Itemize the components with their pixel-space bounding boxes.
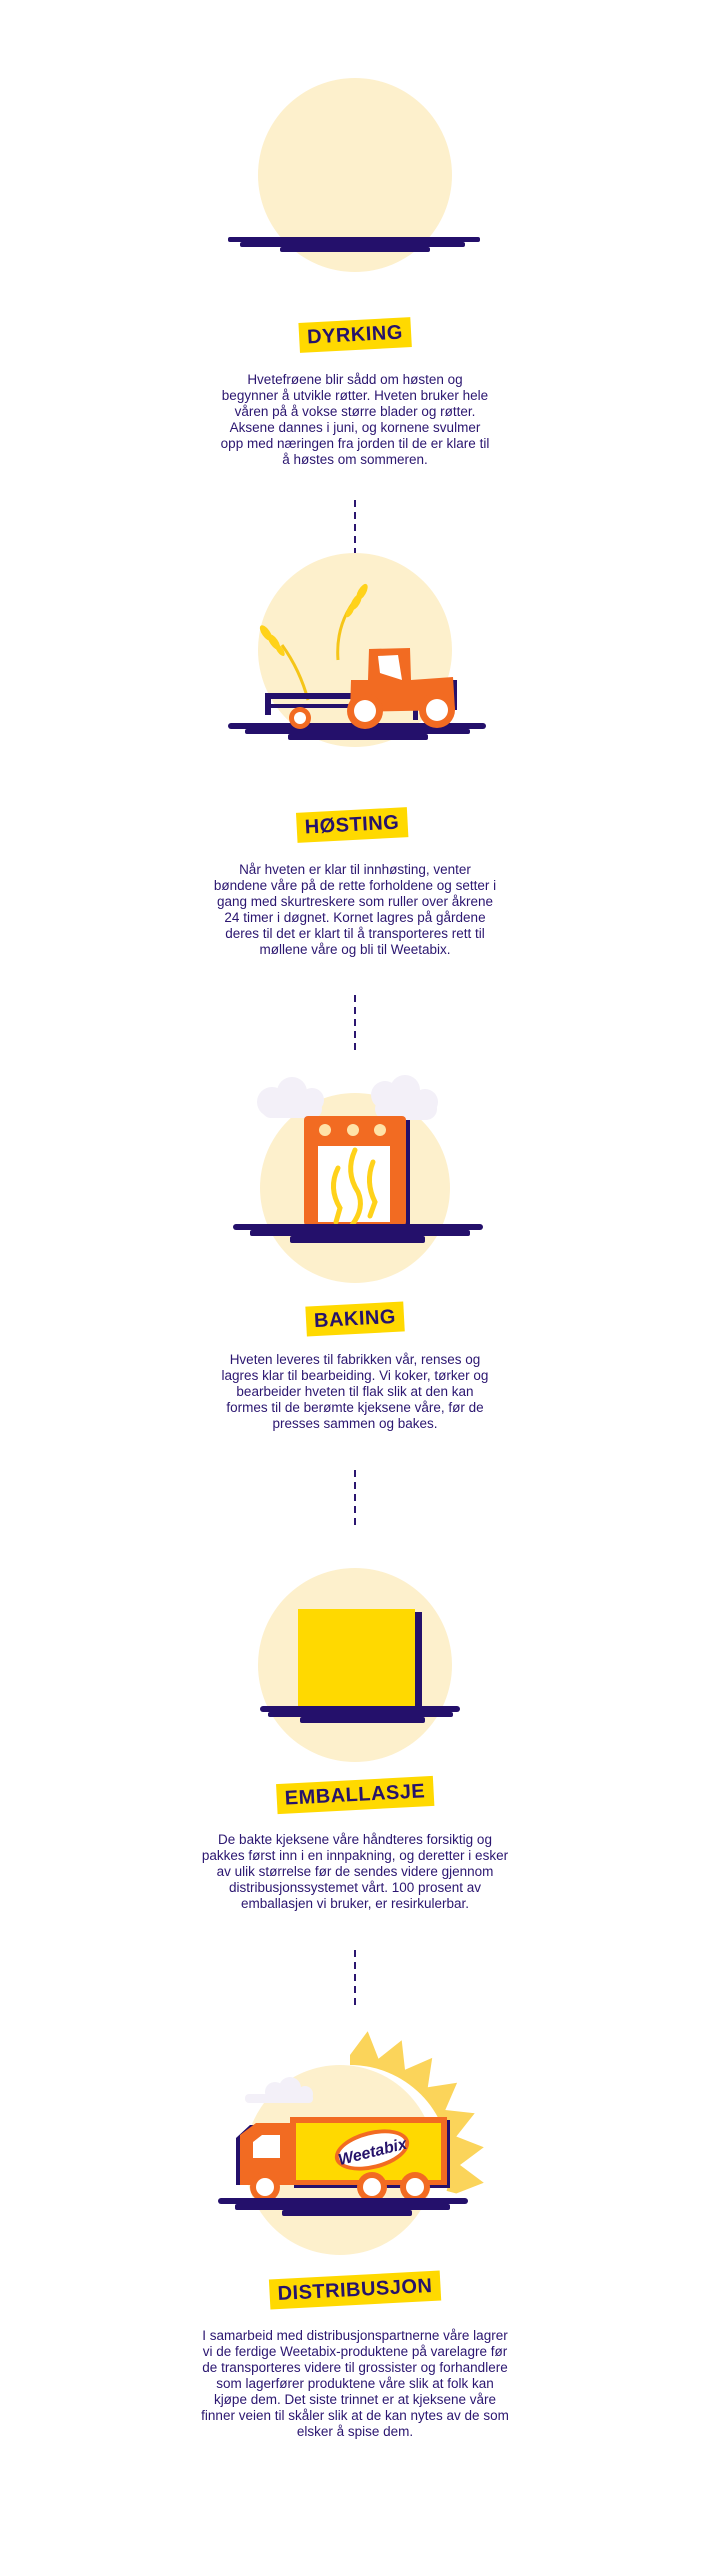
text: baking bbox=[222, 1352, 488, 1431]
icon: delivery truck with sun: Weetabix bbox=[337, 2135, 410, 2169]
text: dyrking: begynner å utvikle røtter. Hveten bruker hele bbox=[222, 388, 488, 403]
label: DISTRIBUSJON: DISTRIBUSJON bbox=[277, 2275, 433, 2305]
text: baking: bearbeider hveten til flak slik at den kan bbox=[236, 1384, 474, 1399]
label: HØSTING: HØSTING bbox=[304, 812, 400, 838]
text: distribusjon: I samarbeid med distribusjonspartnerne våre lagrer bbox=[202, 2328, 508, 2343]
text: distribusjon: elsker å spise dem. bbox=[297, 2424, 413, 2439]
text: høsting: bøndene våre på de rette forholdene og setter i bbox=[214, 878, 496, 893]
text: dyrking bbox=[221, 372, 489, 467]
arrow: dashed connector 3 bbox=[354, 1470, 356, 1530]
arrow: dashed connector 2 bbox=[354, 995, 356, 1055]
text: høsting: møllene våre og bli til Weetabix. bbox=[259, 942, 451, 957]
text: baking: lagres klar til bearbeiding. Vi koker, tørker og bbox=[222, 1368, 488, 1383]
text: emballasje: av ulik størrelse før de sendes videre gjennom bbox=[217, 1864, 493, 1879]
label: BAKING: BAKING bbox=[314, 1306, 396, 1332]
arrow: dashed connector 1 bbox=[354, 500, 356, 560]
label: DYRKING bbox=[298, 317, 412, 353]
text: dyrking: å høstes om sommeren. bbox=[282, 452, 428, 467]
text: baking: formes til de berømte kjeksene våre, før de bbox=[226, 1400, 484, 1415]
text: emballasje: emballasjen vi bruker, er resirkulerbar. bbox=[241, 1896, 469, 1911]
text: baking: Hveten leveres til fabrikken vår, renses og bbox=[230, 1352, 480, 1367]
icon: package box bbox=[258, 1568, 460, 1762]
icon: oven bbox=[233, 1075, 483, 1283]
text: emballasje: De bakte kjeksene våre håndteres forsiktig og bbox=[218, 1832, 492, 1847]
text: emballasje: distribusjonssystemet vårt. 100 prosent av bbox=[229, 1880, 481, 1895]
label: HØSTING bbox=[296, 807, 408, 843]
text: dyrking: Aksene dannes i juni, og kornene svulmer bbox=[230, 420, 480, 435]
label: DISTRIBUSJON bbox=[269, 2271, 441, 2309]
text: distribusjon: kjøpe dem. Det siste trinnet er at kjeksene våre bbox=[214, 2392, 496, 2407]
text: emballasje bbox=[202, 1832, 508, 1911]
text: høsting bbox=[214, 862, 496, 957]
label: BAKING bbox=[305, 1301, 405, 1337]
icon: tractor harvest bbox=[228, 553, 486, 747]
icon: delivery truck with sun bbox=[218, 2031, 484, 2255]
text: høsting: gang med skurtreskere som ruller over åkrene bbox=[217, 894, 493, 909]
label: EMBALLASJE: EMBALLASJE bbox=[284, 1780, 426, 1810]
text: dyrking: våren på å vokse større blader og røtter. bbox=[235, 404, 475, 419]
icon: step 1 field bbox=[228, 78, 480, 272]
text: baking: presses sammen og bakes. bbox=[272, 1416, 438, 1431]
text: høsting: 24 timer i døgnet. Kornet lagres på gårdene bbox=[224, 910, 486, 925]
arrow: dashed connector 4 bbox=[354, 1950, 356, 2010]
text: dyrking: opp med næringen fra jorden til de er klare til bbox=[221, 436, 489, 451]
text: emballasje: pakkes først inn i en innpakning, og deretter i esker bbox=[202, 1848, 508, 1863]
label: DYRKING: DYRKING bbox=[307, 322, 403, 348]
text: dyrking: Hvetefrøene blir sådd om høsten og bbox=[247, 372, 463, 387]
text: høsting: Når hveten er klar til innhøsting, venter bbox=[239, 862, 471, 877]
text: høsting: deres til det er klart til å transporteres rett til bbox=[225, 926, 485, 941]
text: distribusjon: vi de ferdige Weetabix-produktene på varelagre før bbox=[203, 2344, 507, 2359]
text: distribusjon: de transporteres videre til grossister og forhandlere bbox=[202, 2360, 508, 2375]
text: distribusjon bbox=[201, 2328, 509, 2439]
label: EMBALLASJE bbox=[276, 1776, 434, 1814]
text: distribusjon: finner veien til skåler slik at de kan nytes av de som bbox=[201, 2408, 509, 2423]
text: distribusjon: som lagerfører produktene våre slik at folk kan bbox=[216, 2376, 494, 2391]
